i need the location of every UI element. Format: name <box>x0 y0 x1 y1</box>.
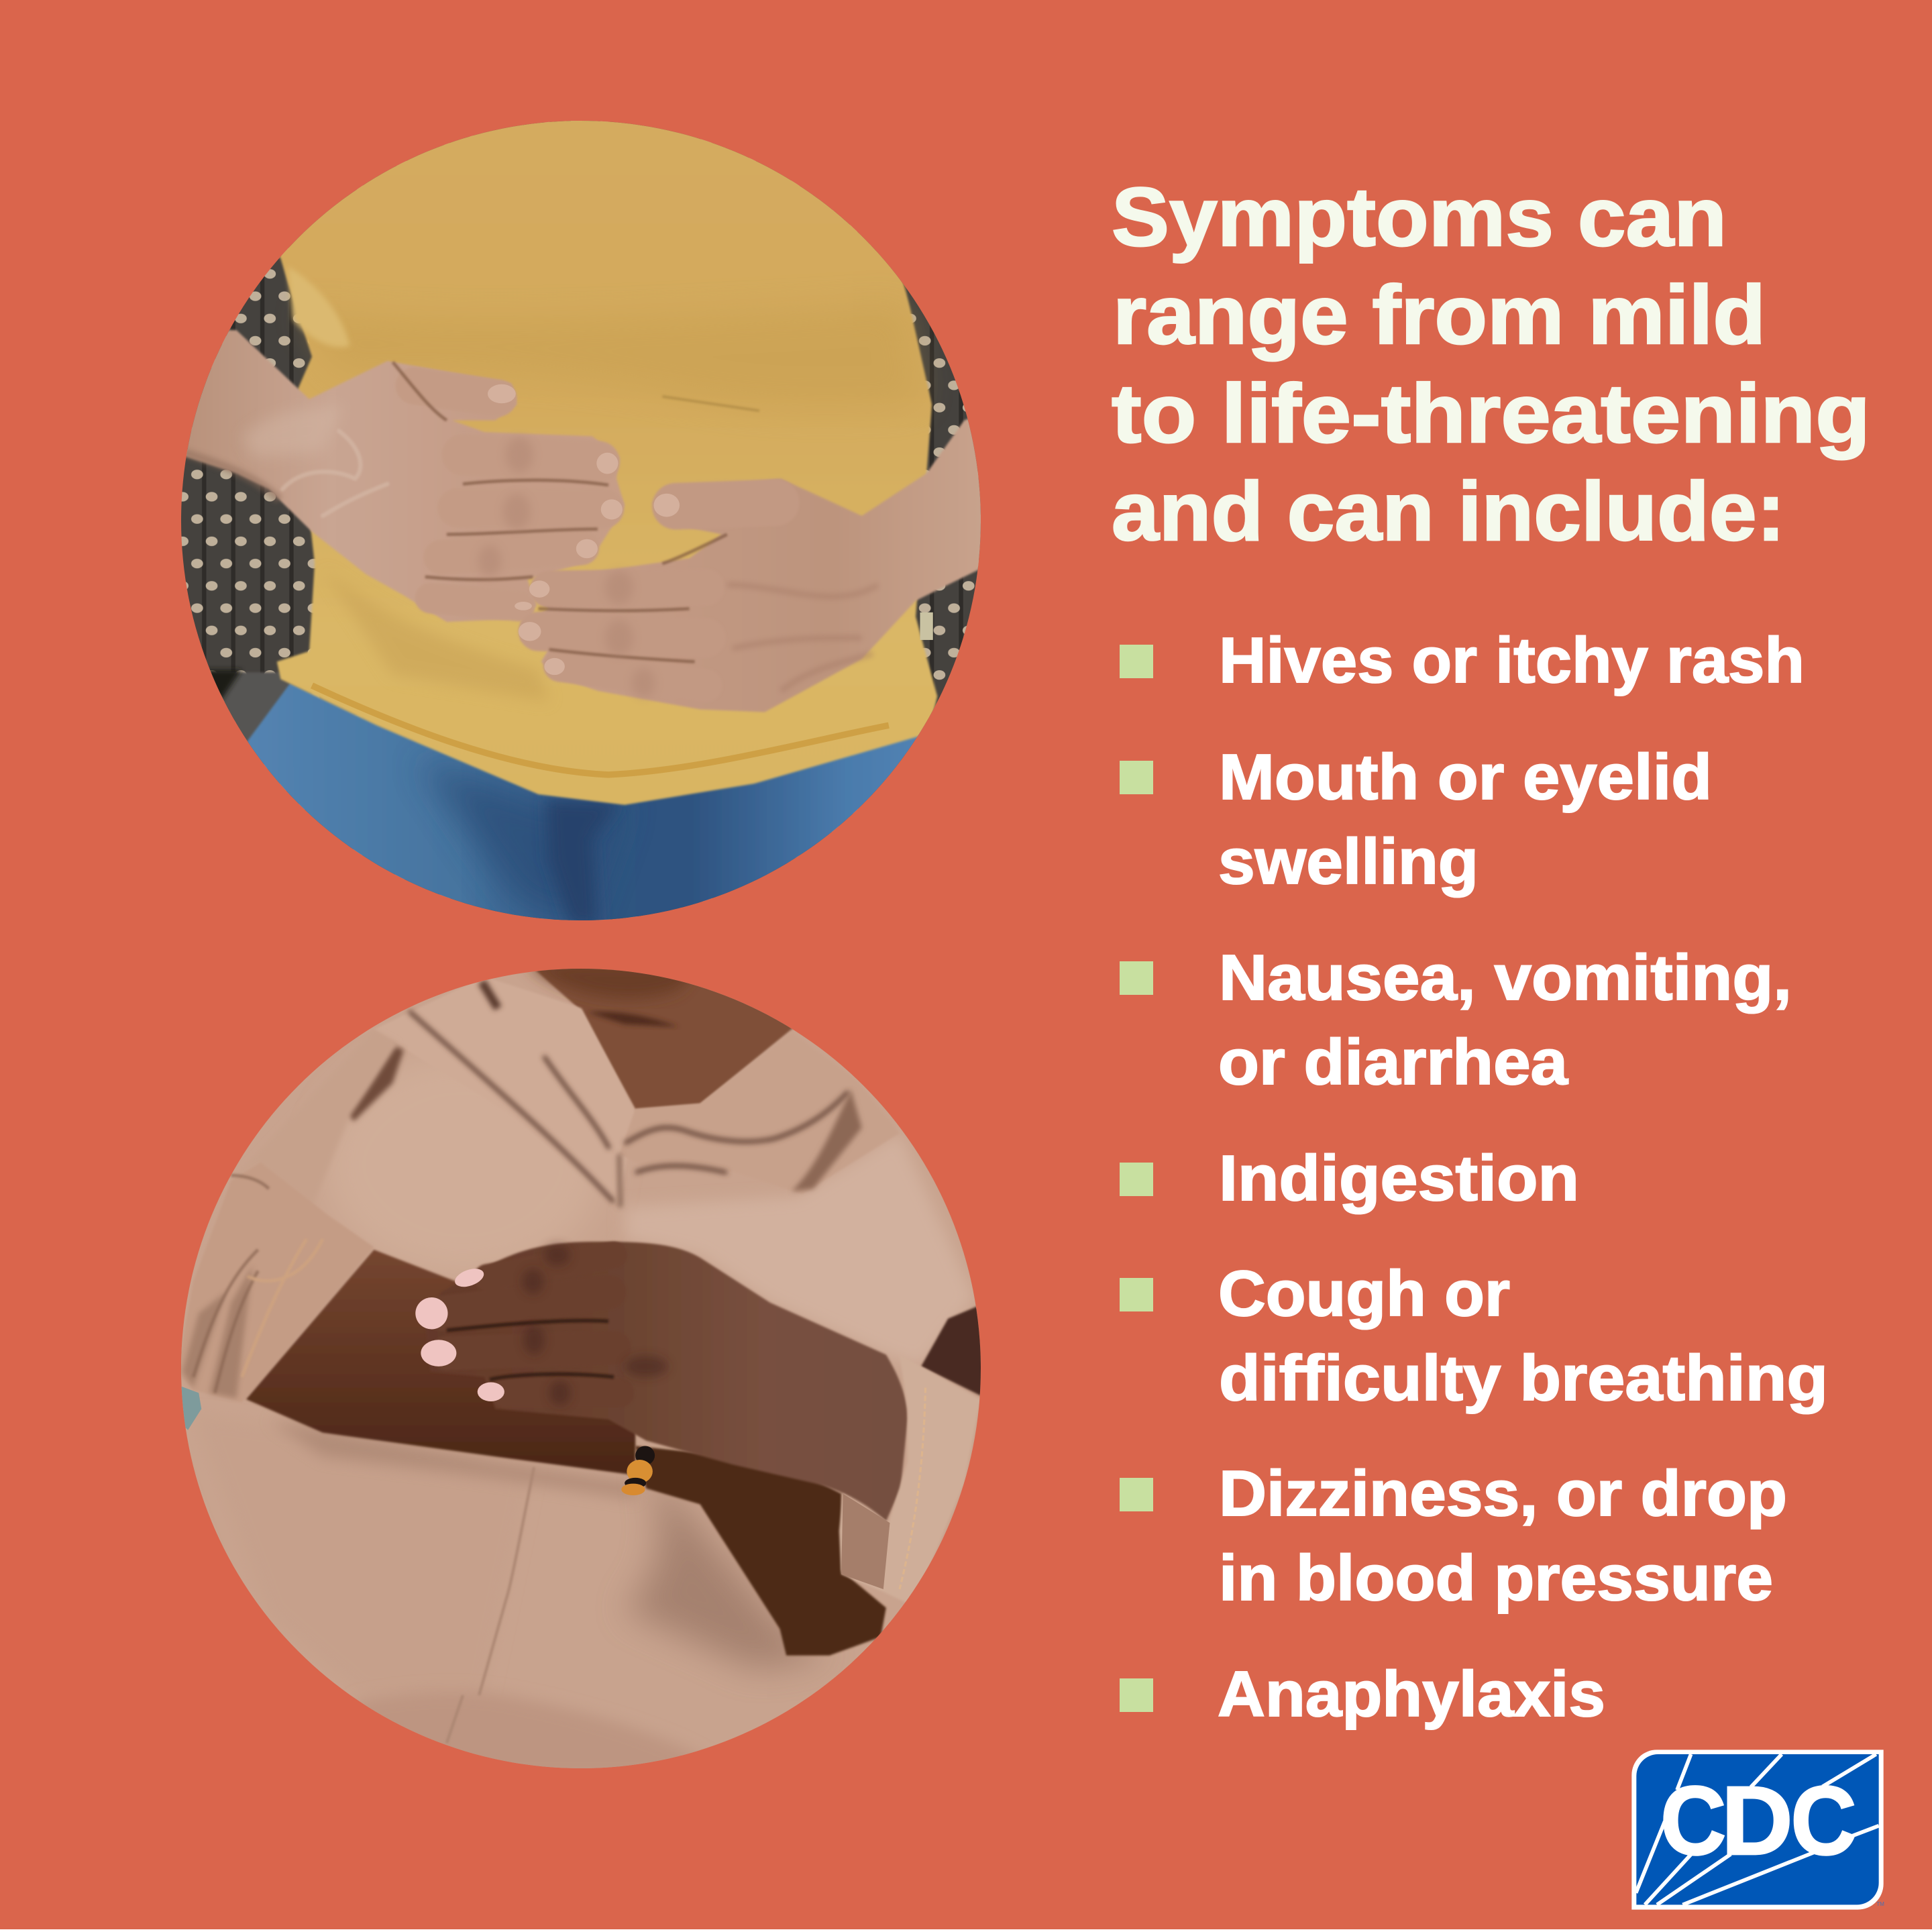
cuff shadow and stitching <box>841 1494 890 1589</box>
pale wrist <box>242 405 344 458</box>
rolled sleeve <box>177 1162 374 1403</box>
symptom bullets <box>1120 645 1153 1712</box>
symptom list: Nausea, vomiting, <box>1219 942 1792 1014</box>
blouse chest <box>323 1053 603 1276</box>
left hand fingers <box>415 386 604 606</box>
symptom list: Anaphylaxis <box>1218 1658 1605 1730</box>
collar right <box>619 1032 900 1194</box>
pink nails <box>415 1265 504 1401</box>
right hand finger gaps <box>539 535 727 661</box>
symptom list: difficulty breathing <box>1219 1342 1828 1414</box>
lower wrist and hand <box>635 1446 886 1656</box>
logo letters: C <box>1660 1766 1726 1875</box>
CDC logo <box>1631 1750 1884 1910</box>
collar left <box>374 977 635 1205</box>
neck <box>527 963 794 1109</box>
lower shirt shade <box>352 600 541 695</box>
arm hole shadow <box>350 1048 398 1117</box>
jeans fly <box>547 800 619 924</box>
heading: and can include: <box>1112 466 1785 558</box>
logo blue field <box>1636 1754 1879 1904</box>
heading: Symptoms can <box>1112 171 1727 264</box>
heading: range from mild <box>1113 269 1766 362</box>
dark background right <box>921 1303 986 1398</box>
right hand tendons <box>727 585 878 691</box>
blouse seam <box>447 1467 534 1743</box>
left arm and hand <box>172 330 625 622</box>
jeans <box>247 683 923 920</box>
lower left blouse <box>193 1414 533 1695</box>
shirt folds <box>301 304 921 407</box>
jeans dark crease <box>425 760 574 920</box>
upper hand <box>425 1242 908 1521</box>
beaded bracelet <box>621 1446 655 1495</box>
trademark: TM <box>1876 1901 1884 1907</box>
collar right shadow <box>792 1091 862 1191</box>
shadow under forearm <box>269 1419 635 1499</box>
logo letters: C <box>1790 1766 1857 1875</box>
black cushion shadow <box>209 667 244 701</box>
right hand nails <box>519 494 680 675</box>
left hand nails <box>488 384 623 610</box>
arm shadow <box>182 452 280 500</box>
symptom list: in blood pressure <box>1219 1542 1773 1614</box>
sleeve opening <box>288 266 350 347</box>
symptom list: Indigestion <box>1219 1142 1579 1214</box>
neck shadow <box>587 1012 678 1027</box>
photo: woman scratching arm <box>161 953 1006 1784</box>
symptom list: swelling <box>1218 826 1479 898</box>
blouse base <box>161 953 1006 1784</box>
shirt label <box>920 612 933 640</box>
hem stitching <box>312 686 889 775</box>
symptom list: Mouth or eyelid <box>1219 741 1712 813</box>
symptom list: Hives or itchy rash <box>1219 625 1805 696</box>
lower blouse shadow <box>625 1462 829 1669</box>
patterned couch <box>161 107 1006 939</box>
right arm and hand <box>519 405 1002 712</box>
t-shirt <box>248 107 937 805</box>
shoulder <box>231 1030 398 1208</box>
logo letters <box>1660 1766 1857 1875</box>
symptom list <box>1218 625 1828 1730</box>
forearm <box>246 1250 635 1475</box>
symptom list: Cough or <box>1218 1258 1510 1330</box>
veins <box>282 431 388 516</box>
photo: man holding stomach <box>161 107 1006 939</box>
collar right lines <box>619 1091 849 1208</box>
sleeve folds <box>193 1175 323 1393</box>
collar left lines <box>409 981 614 1202</box>
logo rays <box>1636 1754 1879 1904</box>
symptom list: or diarrhea <box>1218 1026 1568 1098</box>
right cuff <box>839 1354 980 1606</box>
knuckle creases <box>447 1321 614 1380</box>
symptom list: Dizziness, or drop <box>1219 1458 1787 1529</box>
knuckle shading <box>522 1244 667 1405</box>
fingers <box>441 1255 619 1393</box>
right hand knuckles <box>605 570 655 698</box>
heading: to life-threatening <box>1112 368 1870 460</box>
right blouse <box>625 1133 975 1366</box>
knuckle shading <box>478 437 533 577</box>
grey cushion <box>211 671 290 752</box>
shirt crease <box>662 396 759 411</box>
logo white border <box>1631 1750 1884 1910</box>
finger gaps <box>393 362 608 580</box>
heading <box>1112 171 1870 558</box>
chin shadow <box>527 963 700 998</box>
lower blouse fold <box>355 1690 733 1780</box>
right hand fingers <box>539 502 775 686</box>
teal background <box>177 1385 201 1430</box>
sleeve dark folds <box>182 1266 253 1398</box>
logo letters: D <box>1721 1766 1793 1875</box>
